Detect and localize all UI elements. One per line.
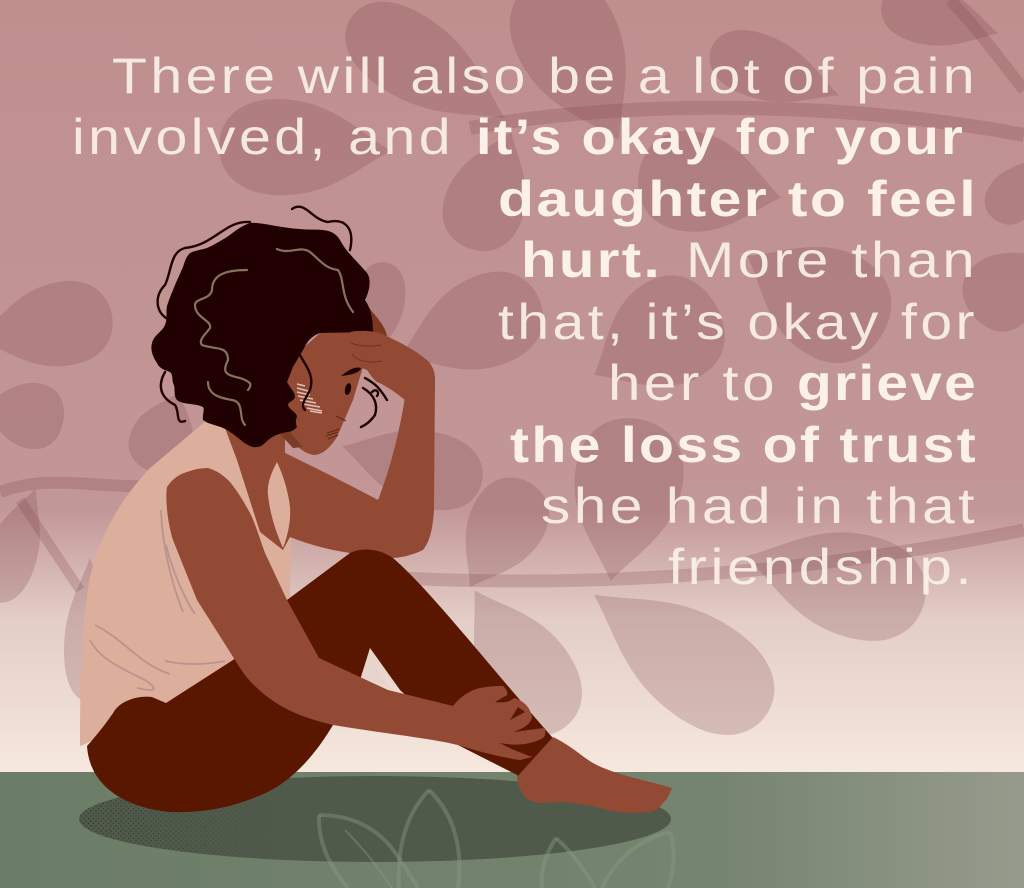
- headline text: her to: [608, 355, 778, 411]
- knee gap: [361, 648, 390, 688]
- shirt: [80, 415, 291, 746]
- near arm and hand: [166, 468, 545, 760]
- neck, chest and raised arm: [225, 378, 435, 558]
- loose curls: [158, 207, 387, 427]
- back hair texture: [362, 300, 387, 336]
- hair: [151, 223, 373, 447]
- headline text: grieve: [797, 355, 978, 411]
- headline text: involved, and: [72, 109, 454, 165]
- floor leaf outlines: [319, 790, 674, 888]
- foot: [517, 737, 672, 813]
- headline text: hurt.: [521, 232, 662, 288]
- eyebrow and eye: [341, 367, 361, 376]
- finger lines: [351, 343, 382, 362]
- blush stripes: [297, 384, 322, 413]
- face: [270, 332, 364, 455]
- shirt inner fold: [268, 462, 290, 548]
- headline text: that, it’s okay for: [498, 294, 978, 350]
- headline text: friendship.: [668, 539, 975, 595]
- shirt folds: [90, 510, 225, 690]
- figure: woman sitting: [80, 207, 672, 813]
- hand on forehead: [350, 331, 435, 420]
- neck shading: [280, 432, 303, 448]
- hair highlights: [195, 249, 353, 425]
- legs: [87, 549, 558, 812]
- headline text: she had in that: [541, 478, 978, 534]
- floor: [0, 772, 1024, 888]
- headline text: [72, 48, 978, 595]
- floor shadow: [79, 776, 671, 862]
- headline text: daughter to feel: [498, 171, 978, 227]
- finger gap: [510, 707, 525, 720]
- cheek stubble: [326, 416, 346, 439]
- headline text: There will also be a lot of pain: [112, 48, 978, 104]
- headline text: the loss of trust: [510, 417, 978, 473]
- headline text: it’s okay for your: [476, 109, 965, 165]
- headline text: More than: [686, 232, 978, 288]
